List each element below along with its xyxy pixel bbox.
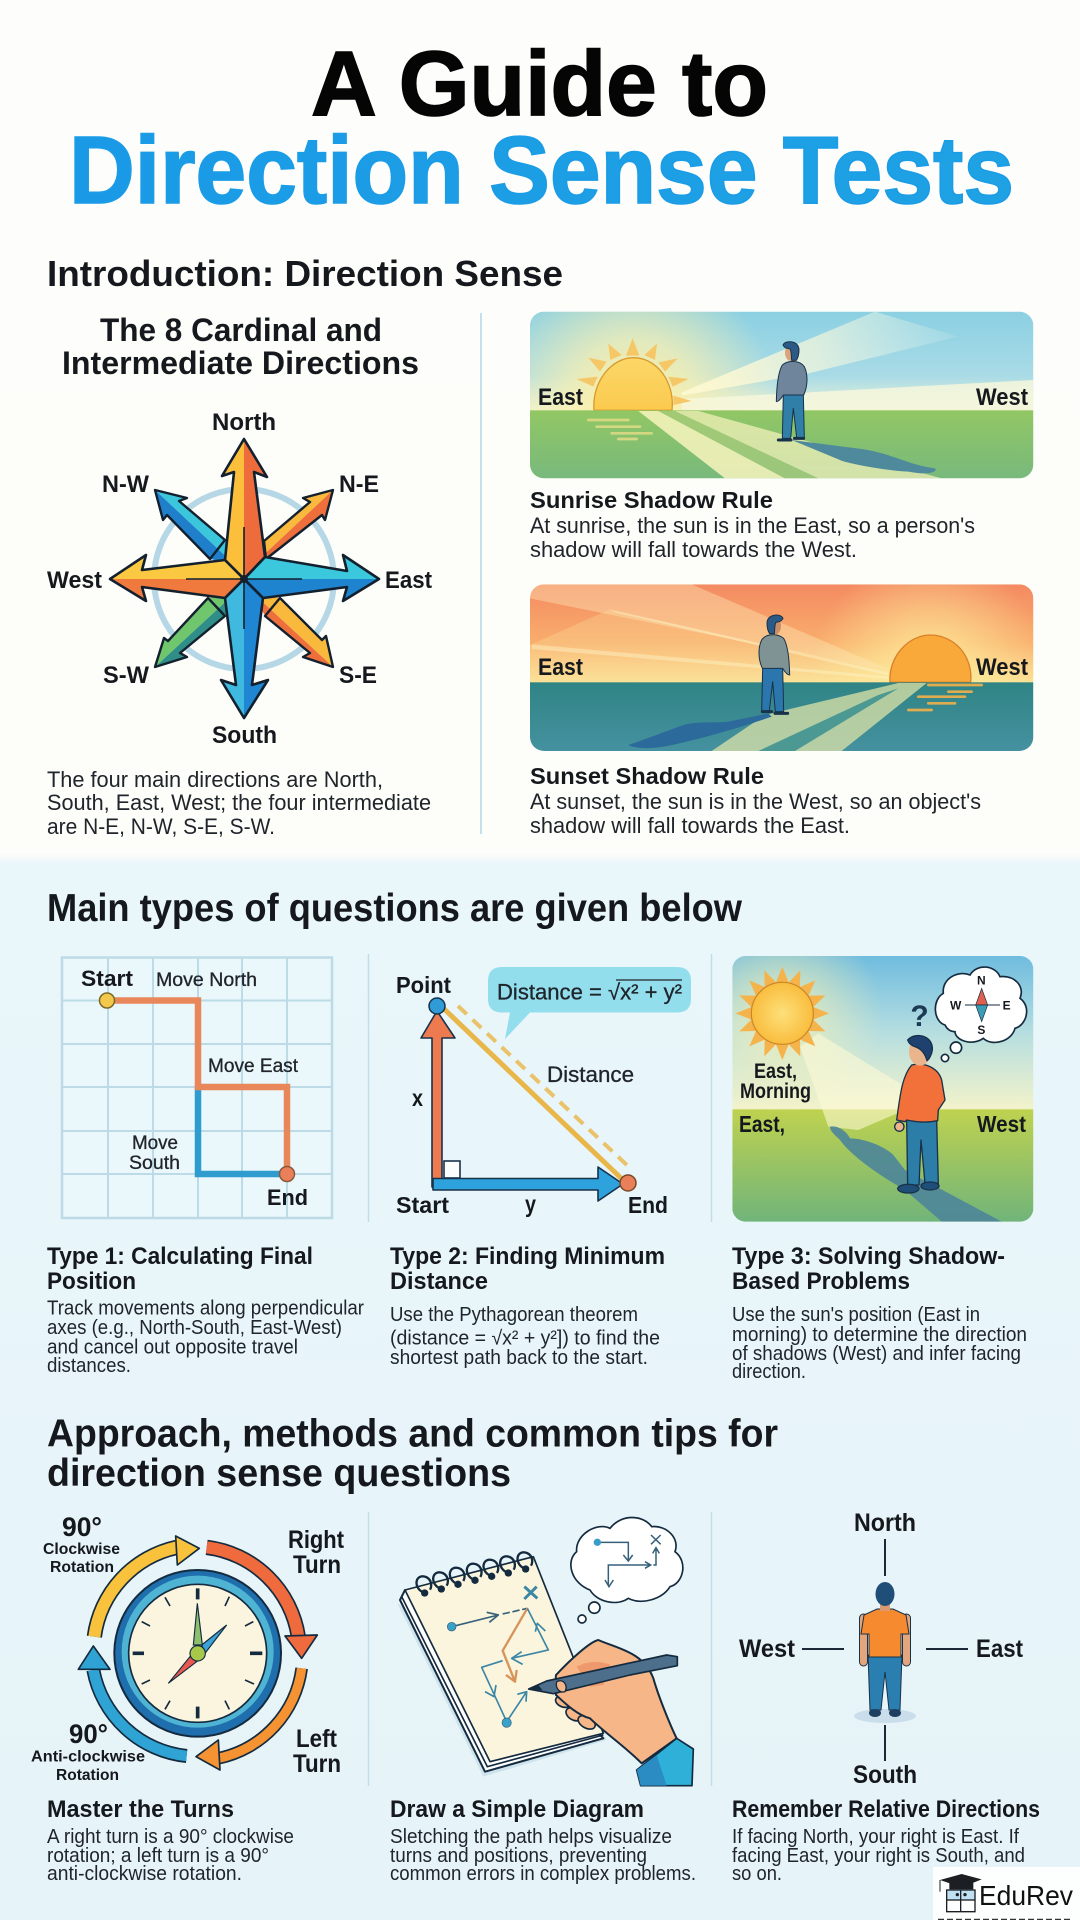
text: type 1 <box>47 1243 364 1377</box>
text: type 2: Use the Pythagorean theorem <box>390 1304 638 1326</box>
thought bubble: compass: E <box>1003 998 1011 1012</box>
text: type 3: Based Problems <box>732 1268 910 1295</box>
text: sunset rule: shadow will fall towards the East. <box>530 813 850 838</box>
text: sunset labels <box>538 654 1028 681</box>
compass labels <box>47 409 432 749</box>
chart: right triangle distance: Start <box>396 1192 449 1218</box>
chart: right triangle distance: End <box>628 1192 668 1218</box>
illustration: notebook and hand <box>397 1517 693 1786</box>
text: sunrise labels: East <box>538 384 583 411</box>
heading: approach <box>47 1412 778 1495</box>
text: sunset rule: At sunset, the sun is in the West, so an object's <box>530 789 981 814</box>
title: A Guide to <box>311 33 768 135</box>
text: sun panel labels <box>739 1060 1026 1137</box>
compass labels: North <box>212 409 276 436</box>
thought bubble: route <box>571 1517 683 1623</box>
text: type 3: of shadows (West) and infer facing <box>732 1343 1021 1365</box>
compass labels: East <box>385 567 432 594</box>
illustration: person with relative directions: South <box>853 1761 917 1789</box>
text: draw a simple diagram <box>390 1796 696 1885</box>
text: draw a simple diagram: common errors in complex problems. <box>390 1863 696 1885</box>
panel: question types <box>47 887 1033 1383</box>
chart: right triangle distance: x <box>412 1085 423 1111</box>
text: type 1: distances. <box>47 1355 131 1377</box>
text: master the turns <box>47 1796 294 1885</box>
chart: grid route: End <box>267 1185 308 1210</box>
text: clock labels: Clockwise <box>43 1541 120 1558</box>
text: type 3 <box>732 1243 1027 1383</box>
thought bubble: compass: ? <box>910 1000 929 1033</box>
thought bubble: compass: N <box>977 973 986 987</box>
text: sun panel labels: East, <box>739 1111 785 1137</box>
text: type 2: Distance <box>390 1268 488 1295</box>
text: type 1: axes (e.g., North-South, East-West) <box>47 1317 342 1339</box>
text: clock labels: 90° <box>62 1512 102 1542</box>
chart: right triangle distance: Point <box>396 972 451 998</box>
chart: grid route: Move North <box>156 970 257 991</box>
text: type 3: direction. <box>732 1361 806 1383</box>
text: master the turns: anti-clockwise rotation. <box>47 1863 242 1885</box>
text: master the turns: Master the Turns <box>47 1796 234 1823</box>
text: sun panel labels: Morning <box>740 1080 811 1103</box>
text: remember relative directions: facing East, your right is South, and <box>732 1845 1025 1867</box>
text: sunset labels: East <box>538 654 583 681</box>
drawn route on notebook <box>447 1587 548 1727</box>
figure: person <box>895 1036 945 1193</box>
subheading: 8 directions: Intermediate Directions <box>62 345 419 381</box>
text: type 2 <box>390 1243 665 1369</box>
text: type 2: (distance = √x² + y²]) to find the <box>390 1328 660 1350</box>
text: type 1: Position <box>47 1268 136 1295</box>
heading: introduction: Introduction: Direction Sense <box>47 253 563 294</box>
text: directions description <box>47 767 431 839</box>
text: remember relative directions <box>732 1796 1040 1885</box>
chart: grid route <box>62 958 332 1218</box>
callout: distance formula: Distance = √x² + y² <box>497 980 682 1004</box>
notebook spirals <box>416 1552 532 1597</box>
illustration: person with relative directions: West <box>739 1635 796 1663</box>
chart: grid route: Move East <box>208 1056 299 1077</box>
text: clock labels <box>31 1512 345 1784</box>
thought bubble: compass <box>910 967 1027 1062</box>
text: clock labels: Turn <box>293 1750 341 1778</box>
text: clock labels: Turn <box>293 1551 341 1579</box>
illustration: clock with turn arrows <box>78 1536 317 1770</box>
figure: person at sunrise <box>776 342 807 440</box>
text: remember relative directions: Remember Relative Directions <box>732 1796 1040 1823</box>
chart: right triangle distance: y <box>525 1191 536 1217</box>
icon: graduation cap face <box>940 1874 982 1912</box>
text: sunset rule <box>530 763 981 838</box>
subheading: 8 directions <box>62 312 419 381</box>
text: type 3: morning) to determine the direction <box>732 1324 1027 1346</box>
chart: grid route: Move <box>132 1133 178 1154</box>
illustration: person with relative directions <box>739 1509 1024 1789</box>
text: sunrise rule: Sunrise Shadow Rule <box>530 487 773 513</box>
text: sun panel labels: West <box>977 1111 1026 1137</box>
icon: hand with pen <box>529 1640 693 1786</box>
heading: approach: Approach, methods and common tips for <box>47 1412 778 1456</box>
chart: right triangle distance <box>396 972 668 1218</box>
thought bubble: compass: W <box>950 998 962 1012</box>
compass labels: S-W <box>103 662 149 689</box>
figure: person at sunset <box>759 615 790 713</box>
illustration: sunset <box>530 584 1033 751</box>
icon: sun <box>736 967 829 1060</box>
text: sunrise labels <box>538 384 1028 411</box>
subheading: 8 directions: The 8 Cardinal and <box>100 312 382 348</box>
heading: question types: Main types of questions are given below <box>47 887 743 930</box>
title <box>69 33 1014 224</box>
text: type 3: Type 3: Solving Shadow- <box>732 1243 1005 1270</box>
callout: distance formula <box>488 967 691 1039</box>
text: clock labels: Rotation <box>56 1767 119 1784</box>
text: sun panel labels: East, <box>754 1060 797 1083</box>
text: type 2: Type 2: Finding Minimum <box>390 1243 665 1270</box>
text: draw a simple diagram: Draw a Simple Diagram <box>390 1796 644 1823</box>
compass labels: South <box>212 722 277 749</box>
text: clock labels: 90° <box>69 1719 108 1749</box>
text: master the turns: A right turn is a 90° clockwise <box>47 1826 294 1848</box>
panel: introduction <box>47 253 1033 839</box>
logo: EduRev <box>933 1867 1080 1920</box>
compass rose <box>110 439 379 718</box>
text: clock labels: Right <box>288 1526 345 1554</box>
text: sunset rule: Sunset Shadow Rule <box>530 763 764 789</box>
chart: right triangle distance: Distance <box>547 1062 634 1087</box>
text: type 1: Type 1: Calculating Final <box>47 1243 313 1270</box>
text: draw a simple diagram: Sletching the path helps visualize <box>390 1826 672 1848</box>
text: sunset labels: West <box>976 654 1028 681</box>
text: sunrise rule: shadow will fall towards the West. <box>530 537 857 562</box>
compass labels: N-E <box>339 471 379 498</box>
text: type 2: shortest path back to the start. <box>390 1347 648 1369</box>
logo: EduRev: EduRev <box>979 1880 1073 1911</box>
compass labels: S-E <box>339 662 377 689</box>
text: clock labels: Anti-clockwise <box>31 1748 145 1766</box>
heading: approach: direction sense questions <box>47 1452 511 1495</box>
text: clock labels: Rotation <box>50 1559 114 1576</box>
illustration: sunrise <box>530 312 1033 478</box>
text: sunrise rule: At sunrise, the sun is in the East, so a person's <box>530 513 975 538</box>
text: sunrise labels: West <box>976 384 1028 411</box>
text: clock labels: Left <box>296 1725 338 1753</box>
text: directions description: The four main directions are North, <box>47 767 383 792</box>
illustration: person with relative directions: East <box>976 1635 1024 1663</box>
thought bubble: compass: S <box>977 1023 985 1037</box>
text: sunrise rule <box>530 487 975 562</box>
text: type 1: and cancel out opposite travel <box>47 1336 298 1358</box>
panel: approach and tips <box>31 1412 1040 1885</box>
text: type 1: Track movements along perpendicular <box>47 1298 364 1320</box>
text: directions description: are N-E, N-W, S-E, S-W. <box>47 814 275 839</box>
chart: grid route: Start <box>81 966 134 991</box>
text: draw a simple diagram: turns and positions, preventing <box>390 1845 647 1867</box>
title: Direction Sense Tests <box>69 117 1014 224</box>
text: master the turns: rotation; a left turn is a 90° <box>47 1845 269 1867</box>
text: remember relative directions: If facing North, your right is East. If <box>732 1826 1019 1848</box>
compass labels: West <box>47 567 102 594</box>
text: remember relative directions: so on. <box>732 1863 782 1885</box>
chart: grid route: South <box>129 1153 180 1174</box>
compass labels: N-W <box>102 471 149 498</box>
text: type 3: Use the sun's position (East in <box>732 1304 980 1326</box>
illustration: person with relative directions: North <box>854 1509 916 1537</box>
illustration: sun shadow person <box>732 956 1034 1222</box>
text: directions description: South, East, West; the four intermediate <box>47 790 431 815</box>
